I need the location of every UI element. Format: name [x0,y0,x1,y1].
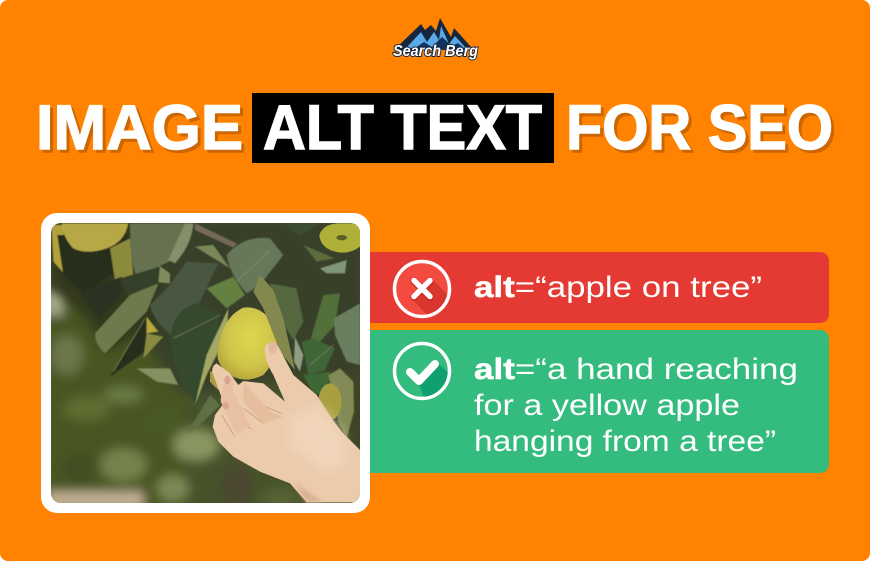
title words: ALT TEXT: ALT TEXT [263,93,542,163]
icon: cross [394,262,455,320]
icon: check [392,342,452,400]
panel: bad alt text [370,252,829,323]
logo: Search Berg [393,18,478,60]
text: good alt: alt=“a hand reaching [474,353,798,386]
blurred background [43,285,300,512]
leaves [51,223,360,438]
text: bad alt: alt=“apple on tree” [474,271,762,304]
title [36,93,836,166]
leaf veins [113,250,333,372]
title shadow: FOR SEO [569,96,836,166]
main apple [217,307,278,380]
text: good alt: for a yellow apple [474,389,740,422]
title shadow [39,96,836,166]
leaf over the apple [253,275,295,370]
title word: IMAGE: IMAGE [36,93,243,163]
panel: good alt text [370,330,829,473]
text: good alt [474,353,798,458]
dark canopy behind the leaves [127,222,363,392]
icon: mountains [394,18,472,50]
photo frame [41,213,370,513]
text: good alt: hanging from a tree” [474,425,776,458]
top-right apple [319,223,360,253]
photo: hand reaching for apple [43,222,363,512]
title highlight box [252,93,554,163]
hand [212,342,360,502]
logo text: Search Berg [393,43,478,60]
title shadow: IMAGE [39,96,246,166]
title words: FOR SEO: FOR SEO [566,93,833,163]
